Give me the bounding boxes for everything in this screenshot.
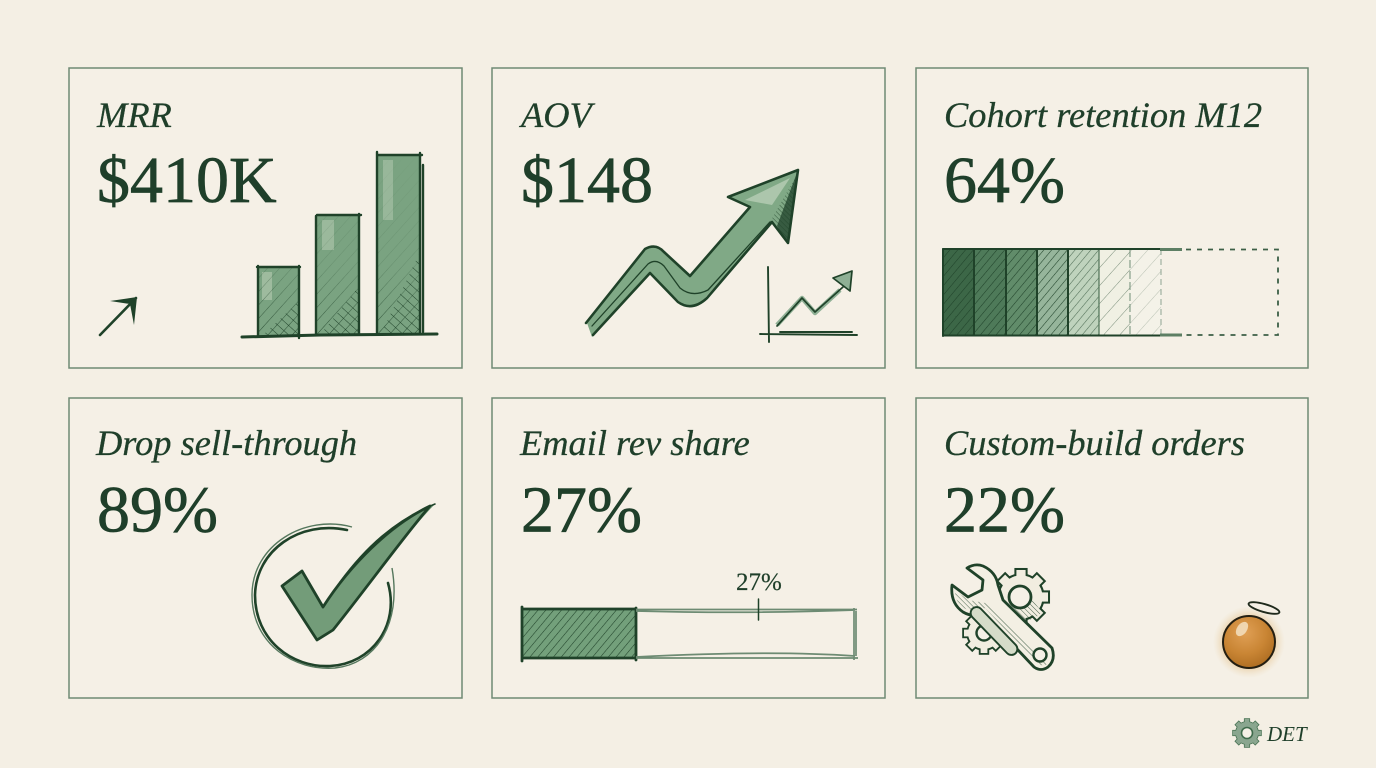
icon: small up-right arrow bbox=[100, 297, 137, 335]
panel: Custom-build orders bbox=[916, 398, 1308, 698]
heading: Drop sell-through: Drop sell-through bbox=[95, 423, 357, 463]
icon: orange orb with halo bbox=[1213, 600, 1285, 678]
panel: AOV bbox=[492, 68, 885, 368]
bar chart: rising bars bbox=[242, 152, 437, 338]
heading: MRR: MRR bbox=[96, 95, 172, 135]
progress bar: fading cohort segments bbox=[943, 249, 1278, 336]
icon: small line chart bbox=[760, 267, 857, 342]
value: $410K: $410K bbox=[97, 144, 277, 217]
value: 89%: 89% bbox=[97, 474, 218, 546]
panel: Email rev share bbox=[492, 398, 885, 698]
value: 27%: 27% bbox=[521, 474, 642, 546]
tick marker bbox=[758, 599, 760, 620]
heading: Email rev share: Email rev share bbox=[519, 423, 750, 463]
heading: Custom-build orders: Custom-build orders bbox=[944, 423, 1245, 463]
icon: wrench and gears bbox=[952, 565, 1053, 670]
panel: Cohort retention bbox=[916, 68, 1308, 368]
value: 22%: 22% bbox=[944, 474, 1065, 546]
heading: Cohort retention M12: Cohort retention M12 bbox=[944, 95, 1262, 135]
value: $148: $148 bbox=[521, 144, 653, 217]
icon: large rising arrow bbox=[586, 170, 798, 337]
icon: check mark in circle bbox=[252, 504, 435, 668]
footer logo: DET bbox=[1233, 719, 1308, 747]
panel: Drop sell-through bbox=[69, 398, 462, 698]
brand text: DET bbox=[1266, 722, 1308, 746]
panel: MRR bbox=[69, 68, 462, 368]
progress bar: email share bbox=[522, 569, 858, 661]
icon: footer gear bbox=[1233, 719, 1261, 747]
value: 64%: 64% bbox=[944, 144, 1065, 217]
heading: AOV: AOV bbox=[519, 95, 596, 135]
tick label: 27%: 27% bbox=[736, 569, 782, 596]
